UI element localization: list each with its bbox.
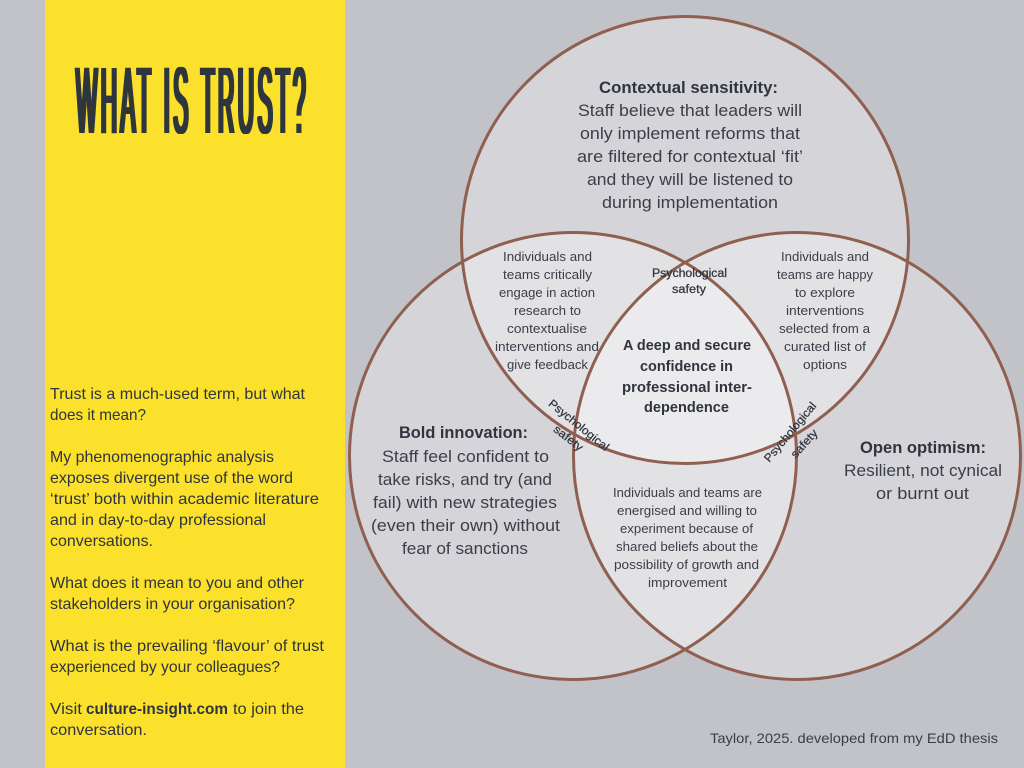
text: overlap top and right: interventions [786, 304, 864, 318]
text: overlap top and right: curated list of [784, 340, 867, 354]
text block: question two: experienced by your colleagues? [50, 659, 280, 676]
text: overlap top and right: options [803, 358, 847, 372]
text: central definition: confidence in [640, 359, 733, 375]
label: psychological safety right: Psychological [762, 400, 819, 465]
label: psychological safety right: safety [789, 427, 821, 461]
text: bold innovation: Staff feel confident to [382, 447, 549, 466]
text block: analysis: ‘trust’ both within academic literature [50, 491, 319, 508]
label: psychological safety left: Psychological [546, 398, 611, 454]
text block: call to action [50, 701, 304, 739]
text: open optimism: Open optimism: [860, 438, 986, 457]
text: contextual sensitivity: Staff believe that leaders will [578, 101, 802, 120]
text: open optimism [844, 438, 1002, 503]
text: overlap left and right: shared beliefs about the [616, 540, 758, 554]
text block: call to action: Visit [50, 701, 83, 718]
text: overlap top and left: engage in action [499, 286, 595, 300]
text: central definition [622, 338, 752, 416]
text block: call to action: to join the [233, 701, 304, 718]
label: psychological safety left: safety [551, 424, 585, 454]
text: overlap top and left: interventions and [495, 340, 599, 354]
text block: introduction: does it mean? [50, 407, 146, 424]
text: overlap top and right [777, 250, 874, 372]
text: contextual sensitivity: only implement reforms that [580, 124, 800, 143]
text: overlap top and left [495, 250, 599, 372]
text: overlap left and right: improvement [648, 576, 728, 590]
citation footer: Taylor, 2025. developed from my EdD thesis [710, 730, 998, 746]
panel: yellow sidebar [45, 0, 345, 768]
text: bold innovation: fear of sanctions [402, 539, 528, 558]
text block: analysis: and in day-to-day professional [50, 512, 266, 529]
text: bold innovation: take risks, and try (and [378, 470, 552, 489]
text block: analysis: conversations. [50, 533, 153, 550]
text: open optimism: Resilient, not cynical [844, 461, 1002, 480]
text: contextual sensitivity: Contextual sensitivity: [599, 78, 778, 97]
text: overlap left and right [613, 486, 762, 590]
circle fills [350, 16, 1020, 680]
text: open optimism: or burnt out [876, 484, 969, 503]
text block: introduction [50, 386, 306, 424]
text: bold innovation [371, 423, 560, 558]
infographic canvas: WHAT IS TRUST? [76, 48, 309, 154]
text: overlap top and left: teams critically [503, 268, 593, 282]
text: contextual sensitivity [577, 78, 803, 212]
text: overlap left and right: Individuals and teams are [613, 486, 762, 500]
text: overlap left and right: experiment because of [620, 522, 754, 536]
text block: analysis: exposes divergent use of the word [50, 470, 293, 487]
text block: question one [50, 575, 305, 613]
text: overlap top and right: teams are happy [777, 268, 874, 282]
label: psychological safety top: Psychological [652, 268, 727, 280]
text: central definition: professional inter- [622, 380, 752, 396]
text block: question one: What does it mean to you and other [50, 575, 305, 592]
text: overlap top and left: give feedback [507, 358, 589, 372]
text block: call to action: conversation. [50, 722, 147, 739]
text: overlap top and right: to explore [795, 286, 855, 300]
text: contextual sensitivity: and they will be listened to [587, 170, 793, 189]
text: overlap top and left: research to [514, 304, 581, 318]
text: central definition: A deep and secure [623, 338, 751, 354]
text block: question two: What is the prevailing ‘flavour’ of trust [50, 638, 325, 655]
chart: three-circle venn diagram [350, 16, 1020, 680]
text: overlap top and left: Individuals and [503, 250, 592, 264]
text: contextual sensitivity: during implementation [602, 193, 778, 212]
text: bold innovation: (even their own) without [371, 516, 560, 535]
text: central definition: dependence [644, 400, 729, 416]
text block: question one: stakeholders in your organisation? [50, 596, 295, 613]
text block: introduction: Trust is a much-used term, but what [50, 386, 306, 403]
text: overlap top and right: Individuals and [781, 250, 869, 264]
text: bold innovation: fail) with new strategies [373, 493, 557, 512]
text: overlap top and right: selected from a [779, 322, 870, 336]
label: psychological safety top [652, 268, 727, 296]
text: overlap left and right: energised and willing to [617, 504, 757, 518]
text block: analysis [50, 449, 319, 550]
text: overlap top and left: contextualise [507, 322, 587, 336]
text block: question two [50, 638, 325, 676]
text block: analysis: My phenomenographic analysis [50, 449, 274, 466]
text: overlap left and right: possibility of growth and [614, 558, 759, 572]
text: bold innovation: Bold innovation: [399, 423, 528, 442]
text: contextual sensitivity: are filtered for contextual ‘fit’ [577, 147, 803, 166]
circle outlines [350, 16, 1020, 680]
label: psychological safety top: safety [672, 284, 706, 296]
text block: call to action: culture-insight.com [86, 701, 228, 718]
